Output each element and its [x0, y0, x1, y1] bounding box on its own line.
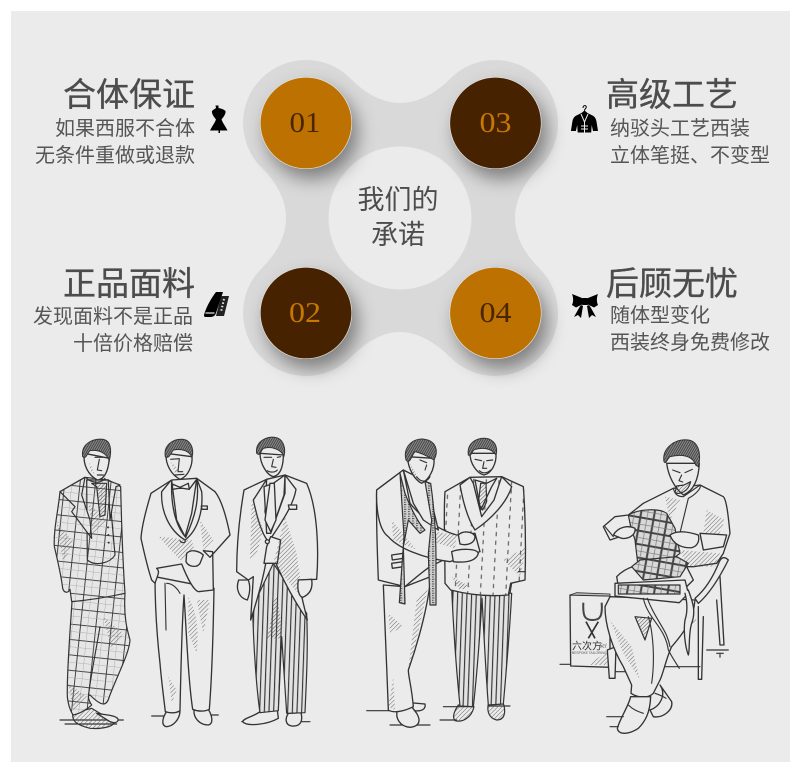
shopping bag	[560, 593, 728, 667]
block: after-sales	[606, 265, 770, 354]
illustration: three men in suits	[54, 437, 318, 729]
circle 04	[450, 267, 541, 359]
circle 04: 04	[480, 298, 512, 329]
figure: man in tuxedo	[141, 439, 230, 727]
block: fit guarantee: 无条件重做或退款	[35, 144, 195, 167]
hub blob shape	[243, 60, 558, 376]
shopping bag: 六次方	[572, 639, 602, 652]
block: genuine fabric	[33, 265, 195, 355]
circle 03	[450, 77, 541, 169]
centre text: 承诺	[371, 220, 425, 250]
circle 02	[260, 267, 352, 359]
block: after-sales: 西装终身免费修改	[610, 331, 770, 354]
figure: man in morning coat	[237, 437, 318, 726]
circle 02: 02	[289, 298, 321, 329]
illustration: man opening garment box	[560, 440, 730, 733]
block: genuine fabric: 十倍价格赔偿	[73, 332, 193, 355]
block: fit guarantee: 合体保证	[63, 76, 195, 113]
block: after-sales: 随体型变化	[610, 304, 710, 327]
block: advanced craft: 高级工艺	[606, 76, 738, 113]
seated man	[603, 440, 730, 733]
illustration: tailor measuring client	[367, 438, 527, 727]
circle 01	[260, 77, 352, 169]
block: genuine fabric: 正品面料	[63, 265, 195, 302]
centre text: 我们的	[358, 185, 438, 215]
block: advanced craft: 立体笔挺、不变型	[610, 144, 770, 167]
icon: suit jacket on hanger	[571, 106, 598, 132]
icon: dress form	[210, 106, 228, 133]
icon: fabric roll	[204, 292, 229, 317]
figure: tailor with tape measure	[367, 439, 480, 727]
shopping bag: 6ci	[599, 643, 607, 649]
circle 01: 01	[290, 108, 320, 139]
circle 03: 03	[480, 108, 512, 139]
block: fit guarantee	[35, 76, 195, 167]
figure: client in double-breasted suit	[440, 438, 527, 721]
block: advanced craft	[606, 76, 770, 167]
icon: bow tie	[572, 294, 598, 318]
centre circle	[328, 146, 472, 290]
block: genuine fabric: 发现面料不是正品	[33, 305, 193, 328]
shopping bag: BESPOKE TAILORING	[572, 651, 607, 655]
block: after-sales: 后顾无忧	[606, 265, 738, 302]
chair	[607, 558, 728, 679]
block: advanced craft: 纳驳头工艺西装	[610, 117, 750, 140]
centre text	[358, 185, 438, 250]
figure: man in plaid suit	[54, 439, 130, 729]
diagram: four-circle promise hub	[243, 60, 558, 376]
block: fit guarantee: 如果西服不合体	[55, 117, 195, 140]
